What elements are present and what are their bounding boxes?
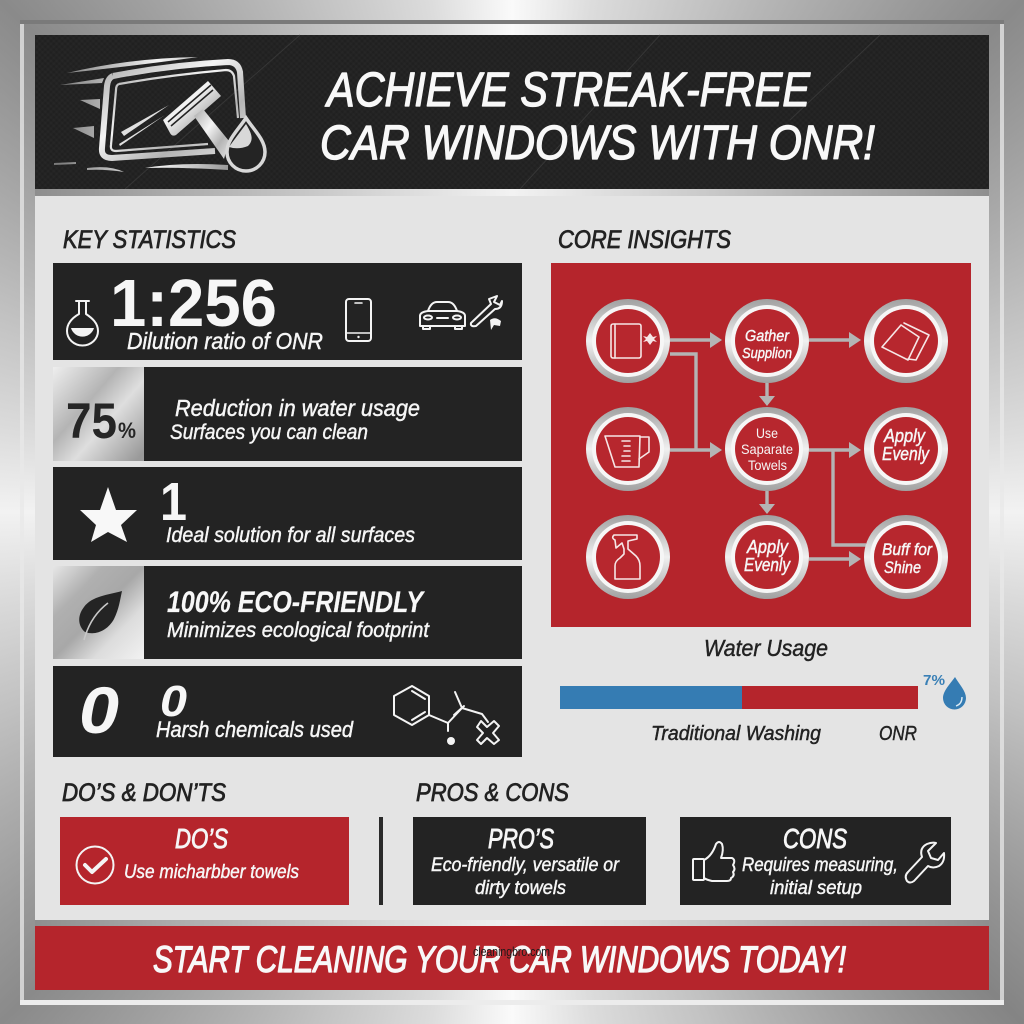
card: cons: CONS [783,823,847,854]
stat value: % [118,418,136,443]
divider bar: bottom [35,920,989,926]
node: apply evenly (right) [864,407,948,491]
header banner [35,35,989,189]
stat label [170,395,420,444]
stat value: 1:256 [110,266,277,341]
icon: squeegee on windshield [54,57,265,172]
axis labels: ONR [879,723,917,745]
node: cloths icon [864,299,948,383]
stat row: harsh chemicals [53,666,522,757]
node: use separate towels: Use [756,425,778,441]
icon: chemical structure [394,686,499,745]
card: cons: initial setup [770,878,862,899]
node: gather supplies: Gather [745,328,790,345]
card: cons: Requires measuring, [742,855,898,876]
icon: phone [346,299,371,341]
node: buff for shine: Buff for [882,540,933,559]
big zero: 0 [79,673,119,747]
icon: star [80,487,137,542]
node: buff for shine [864,515,948,599]
node: apply evenly (right): Apply [883,426,926,446]
footer banner [35,926,989,990]
node: apply evenly (center): Apply [746,537,789,557]
axis labels: Traditional Washing [651,723,821,745]
node: towel icon [586,299,670,383]
stat label: Ideal solution for all surfaces [166,524,415,547]
bar [560,686,918,709]
node: apply evenly (right): Evenly [882,444,930,464]
small zero: 0 [160,677,188,726]
stat label: Surfaces you can clean [170,421,368,444]
node: apply evenly (center) [725,515,809,599]
stat heading: 100% ECO-FRIENDLY [167,586,425,619]
card: do's [60,817,349,905]
chart: water usage [560,635,966,745]
call to action: START CLEANING YOUR CAR WINDOWS TODAY! [153,939,846,980]
node: spray bottle icon [586,515,670,599]
title [320,64,875,170]
card: pros: PRO’S [488,823,554,854]
node: buff for shine: Shine [884,558,921,577]
icon: flask [67,301,98,345]
stat value: 75 [66,393,117,449]
metal tile [53,367,144,461]
metal tile [53,566,144,659]
heading: pros and cons: PROS & CONS [416,779,569,807]
card: do's: DO’S [175,823,228,854]
stat value: 1 [160,472,187,532]
stat row: eco-friendly [53,566,522,659]
arrows [670,332,866,567]
heading: dos and don'ts: DO’S & DON’TS [62,779,226,807]
card: cons [680,817,951,905]
title: CAR WINDOWS WITH ONR! [320,117,875,170]
stat label: Reduction in water usage [175,395,420,421]
icon: wrench [471,296,502,330]
card: pros: dirty towels [475,878,566,899]
chart title: Water Usage [704,635,828,661]
axis labels [651,723,917,745]
node: apply evenly (center): Evenly [744,555,791,575]
icon: wrench [906,843,944,882]
node: gather supplies [725,299,809,383]
stat label: Dilution ratio of ONR [127,328,323,354]
icon: water drop [943,677,966,710]
stat label: Harsh chemicals used [156,717,354,742]
heading: key statistics: KEY STATISTICS [63,226,236,254]
divider: vertical [379,817,383,905]
icon: thumbs up [693,842,734,881]
node: use separate towels: Towels [748,457,787,473]
watermark: cleaningbro.com [473,944,550,959]
card: do's: Use micharbber towels [124,862,299,883]
stat row: ideal solution [53,467,522,560]
value: 7%: 7% [923,672,945,689]
node: use separate towels [725,407,809,491]
stat row: water reduction [53,367,522,461]
card: pros: Eco-friendly, versatile or [431,855,620,876]
title: ACHIEVE STREAK-FREE [324,64,811,117]
icon: leaf [79,591,122,640]
icon: check circle [76,846,114,884]
main light panel [35,196,989,920]
divider bar: top [35,189,989,196]
panel: core insights flowchart [551,263,971,627]
node: use separate towels: Saparate [741,441,793,457]
heading: core insights: CORE INSIGHTS [558,226,731,254]
stat label: Minimizes ecological footprint [167,619,430,642]
stat row: dilution ratio [53,263,522,360]
node: measuring cup icon [586,407,670,491]
icon: car [420,302,465,329]
node: gather supplies: Supplion [742,345,792,362]
card: pros [413,817,646,905]
